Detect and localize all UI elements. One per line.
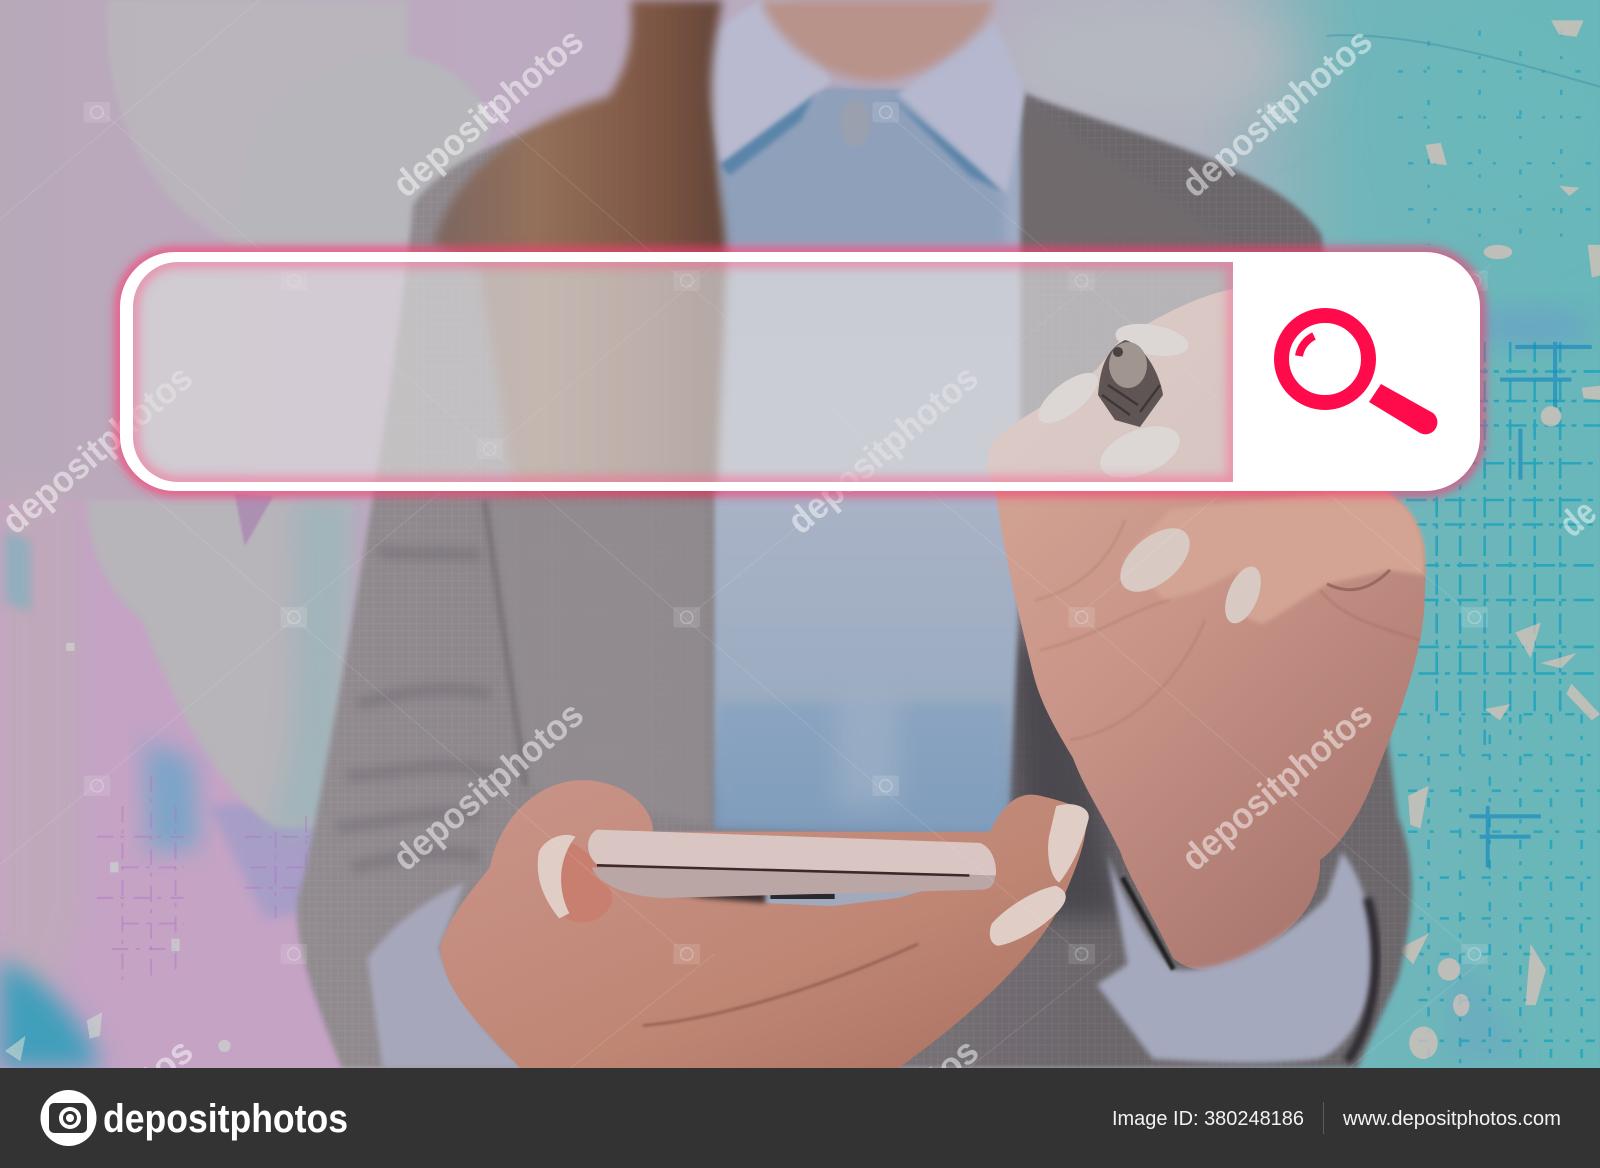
shirt cuffs and sleeves: [367, 852, 1376, 1068]
watermark: depositphotos wordmarks: depositphotos: [385, 20, 591, 205]
marker tip held between fingers: [1098, 340, 1163, 427]
hair: [434, 0, 727, 492]
jacket: [297, 92, 1411, 1068]
logo wordmark: depositphotos: [103, 1097, 348, 1141]
faint teal grid, right: [1397, 342, 1600, 745]
logo: depositphotos camera badge: [40, 1090, 96, 1146]
chin: [760, 0, 995, 82]
fingernails: [1030, 319, 1268, 628]
fingernails: [538, 804, 1089, 946]
neon search bar: [120, 252, 1480, 491]
watermark: faint diagonal lines: [0, 112, 1490, 1068]
image id: Image ID: 380248186: [1112, 1108, 1304, 1130]
sleeve wrinkles: [337, 551, 500, 867]
watermark: depositphotos wordmarks: depositphotos: [780, 357, 986, 542]
watermark: depositphotos wordmarks: depositphotos: [1173, 20, 1380, 205]
watermark: small camera marks: [84, 102, 1488, 964]
hand holding phone: [441, 780, 1089, 1068]
watermark: depositphotos wordmarks: tos: [134, 1030, 201, 1096]
website url: www.depositphotos.com: [1342, 1108, 1561, 1130]
smartphone: [588, 830, 996, 906]
search bar translucent field: [133, 262, 1233, 482]
search bar white frame and button: [120, 252, 1480, 491]
watermark: depositphotos wordmarks: depositphotos: [1173, 693, 1380, 879]
faint ink grid, left: [97, 776, 316, 980]
icon: magnifying glass: [1282, 316, 1437, 434]
confetti flecks: [1398, 20, 1600, 1059]
hand pointing with marker: [988, 289, 1426, 970]
watermark: depositphotos wordmarks: tos: [919, 1030, 986, 1096]
footer bar: [0, 1068, 1600, 1168]
search bar inner glow: [133, 262, 1233, 482]
watermark: depositphotos wordmarks: depositphotos: [0, 357, 200, 542]
thumb and fingers: [1123, 491, 1425, 624]
shirt and collar: [692, 0, 1026, 839]
watermark: depositphotos wordmarks: depositphotos: [385, 693, 591, 879]
